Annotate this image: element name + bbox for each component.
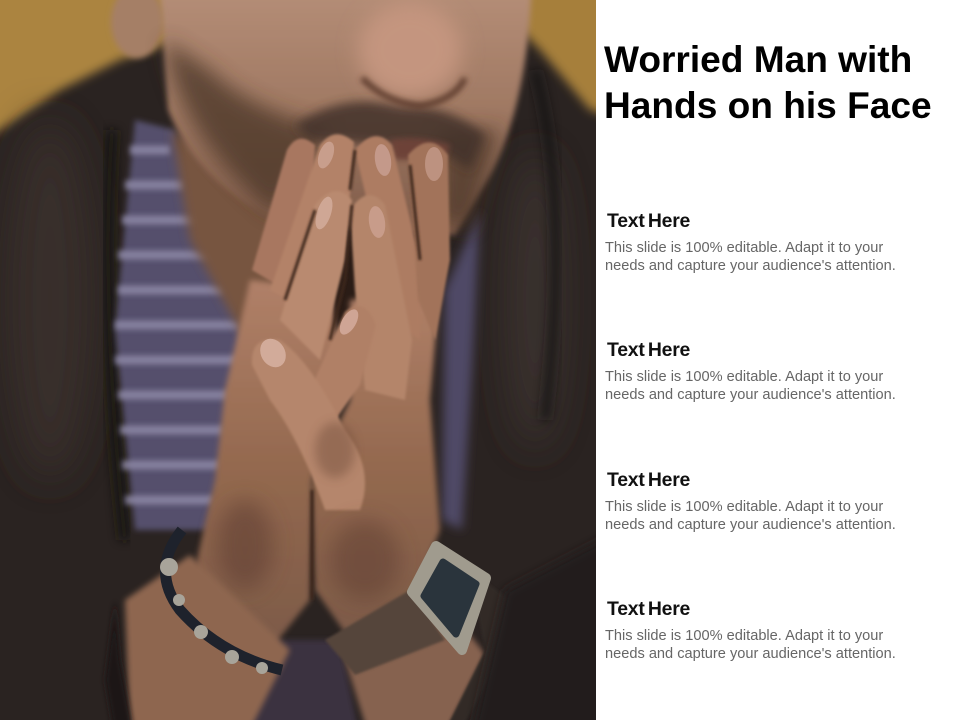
text block 3: Text Here xyxy=(607,469,690,491)
right wrist and watch xyxy=(325,546,510,720)
text block 1: Text Here xyxy=(607,210,690,232)
title: Hands on his Face xyxy=(604,84,932,126)
hands xyxy=(190,134,450,650)
nose xyxy=(358,2,462,98)
left palm and back of hand xyxy=(190,280,345,650)
lips xyxy=(390,138,450,160)
nails xyxy=(318,142,334,168)
text block 4: This slide is 100% editable. Adapt it to your xyxy=(605,628,883,644)
text block 3: needs and capture your audience's attention. xyxy=(605,516,896,532)
interlocked thumbs xyxy=(316,306,362,418)
photo: worried man with hands on his face xyxy=(0,0,596,720)
right palm and back of hand xyxy=(312,290,440,640)
face xyxy=(111,0,532,235)
title: Worried Man with xyxy=(604,38,912,80)
text block 2: needs and capture your audience's attention. xyxy=(605,386,896,402)
neck xyxy=(168,130,273,332)
dark gap behind fingers xyxy=(336,248,354,322)
right fingers xyxy=(356,134,419,298)
wrist hair shading xyxy=(217,500,273,590)
text block 2: This slide is 100% editable. Adapt it to your xyxy=(605,368,883,384)
text block 1: This slide is 100% editable. Adapt it to your xyxy=(605,240,883,256)
finger gaps xyxy=(285,150,420,600)
right jacket sleeve xyxy=(478,548,596,720)
title xyxy=(604,38,932,126)
text block 3 xyxy=(605,469,896,532)
text block 2 xyxy=(605,339,896,402)
left fingers xyxy=(252,139,315,290)
striped shirt xyxy=(115,120,480,720)
stubble xyxy=(165,40,330,215)
jacket xyxy=(5,70,563,540)
text block 4: Text Here xyxy=(607,598,690,620)
text block 1: needs and capture your audience's attention. xyxy=(605,258,896,274)
text block 2: Text Here xyxy=(607,339,690,361)
background wall xyxy=(0,0,620,720)
text block 1 xyxy=(605,210,896,274)
text block 4: needs and capture your audience's attention. xyxy=(605,646,896,662)
text block 4 xyxy=(605,598,896,662)
text block 3: This slide is 100% editable. Adapt it to your xyxy=(605,498,883,514)
left wrist and bracelet xyxy=(105,530,290,720)
